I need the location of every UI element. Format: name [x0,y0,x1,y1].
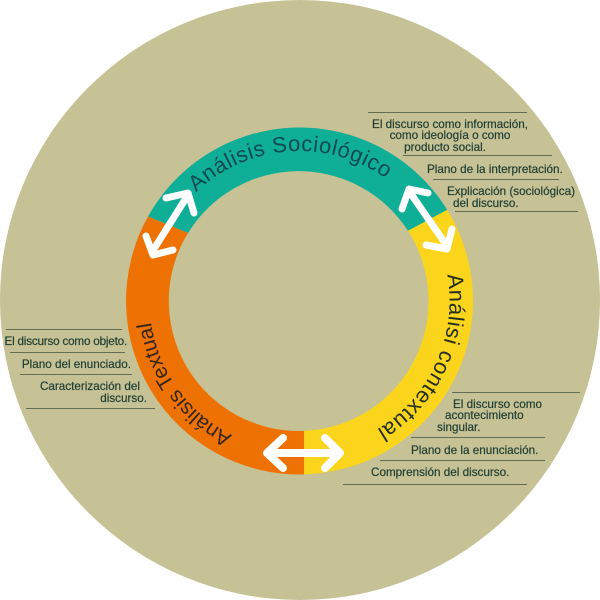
label: Análisis Sociológico: Análisis Sociológico [190,136,390,192]
note: El discurso como información: El discurso como información, [372,118,528,131]
note: El discurso como objeto: El discurso como objeto. [4,335,127,348]
callout: Análisis Sociológico notes: como ideología o como [390,129,511,142]
callout: Análisis Sociológico notes: producto social. [404,141,486,154]
note: Comprensión del discurso: Comprensión del discurso. [371,466,509,479]
arrow: teal to orange [146,193,194,255]
callout: Análisi contextual notes: acontecimiento [445,409,524,422]
note: Plano del enunciado: Plano del enunciado. [22,358,131,371]
callout: Análisi contextual notes [343,392,580,484]
ring diagram [126,128,473,474]
label: Análisis Textual: Análisis Textual [136,324,232,445]
arrow: teal to yellow [402,189,452,249]
note: Explicación sociológica: Explicación (sociológica) [447,185,575,198]
note: El discurso como acontecimiento singular: El discurso como [453,398,542,411]
arrow: orange to yellow [267,438,340,468]
callout: Análisi contextual notes: singular. [437,421,481,434]
note: Plano de la interpretación: Plano de la interpretación. [427,163,563,176]
ring segment: Análisis Textual [126,216,304,474]
callout: Análisis Textual notes [4,330,155,408]
ring segment: Análisis Sociológico [148,127,447,233]
label: Análisi contextual: Análisi contextual [378,274,466,442]
note: Plano de la enunciación: Plano de la enunciación. [411,444,538,457]
note: Caracterización del discurso: Caracterización del [40,380,140,393]
ring segment: Análisi contextual [304,210,473,474]
callout: Análisis Sociológico notes: del discurso. [453,197,519,210]
callout: Análisis Textual notes: discurso. [100,392,147,405]
callout: Análisis Sociológico notes [368,112,578,212]
